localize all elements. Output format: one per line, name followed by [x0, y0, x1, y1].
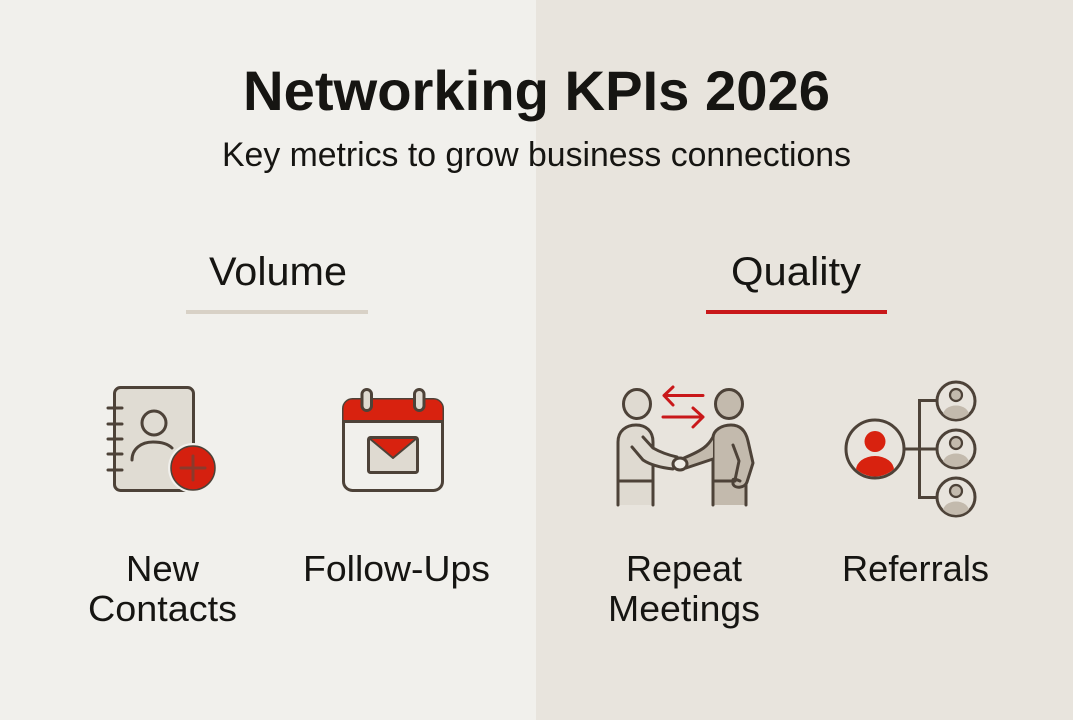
- label: New Contacts: New: [126, 548, 200, 589]
- icon: handshake with exchange arrows: [618, 387, 753, 505]
- icon: contact book with plus: [108, 388, 218, 493]
- underline: Volume: [186, 310, 368, 314]
- referral person 3: [937, 478, 975, 520]
- central red person: [846, 420, 904, 484]
- heading: Quality: Quality: [731, 250, 861, 294]
- label: Referrals: Referrals: [842, 548, 989, 589]
- panel: right background: [536, 0, 1073, 720]
- icon: referral network: [846, 382, 975, 520]
- right person: [678, 390, 753, 505]
- referral person 2: [937, 430, 975, 472]
- label: New Contacts: Contacts: [88, 588, 237, 629]
- referral person 1: [937, 382, 975, 424]
- title: Networking KPIs 2026: [243, 59, 830, 122]
- left person: [618, 390, 653, 505]
- icon: calendar with envelope: [344, 390, 442, 490]
- panel: left background: [0, 0, 536, 720]
- heading: Volume: Volume: [209, 250, 347, 294]
- label: New Contacts: [88, 548, 237, 629]
- label: Repeat Meetings: Meetings: [608, 588, 760, 629]
- label: Repeat Meetings: [608, 548, 760, 629]
- label: Repeat Meetings: Repeat: [626, 548, 742, 589]
- label: Follow-Ups: Follow-Ups: [303, 548, 490, 589]
- exchange arrows: [663, 387, 703, 427]
- underline: Quality: [706, 310, 887, 314]
- handshake arm: [632, 437, 687, 470]
- subtitle: Key metrics to grow business connections: [222, 136, 851, 174]
